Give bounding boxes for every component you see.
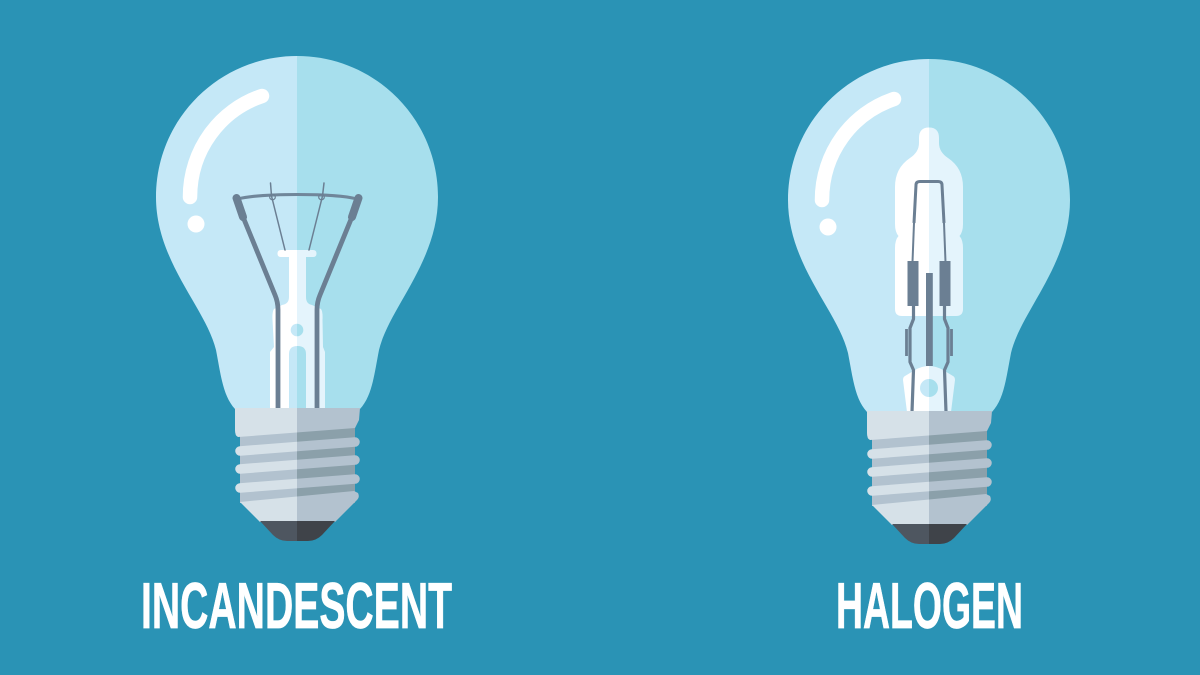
label: halogen: HALOGEN (836, 569, 1023, 642)
label: incandescent: INCANDESCENT (141, 569, 452, 642)
support wires and filament (236, 183, 358, 408)
halogen capsule (895, 128, 963, 316)
glass highlight dot (820, 218, 836, 236)
base cap (892, 524, 967, 544)
centre electrode (926, 273, 933, 366)
glass highlight arc (822, 99, 894, 200)
glass envelope (788, 59, 1070, 412)
glass highlight dot (188, 216, 204, 232)
halogen bulb (788, 59, 1070, 544)
glass stem (270, 250, 325, 409)
screw base (235, 408, 360, 541)
left electrode block (908, 261, 918, 306)
incandescent bulb (156, 56, 438, 541)
capsule base (903, 366, 955, 412)
base cap (260, 521, 335, 541)
halogen filament and leads (906, 182, 952, 412)
screw base (867, 411, 992, 544)
glass highlight arc (190, 96, 262, 197)
glass envelope (156, 56, 438, 409)
right electrode block (940, 261, 950, 306)
